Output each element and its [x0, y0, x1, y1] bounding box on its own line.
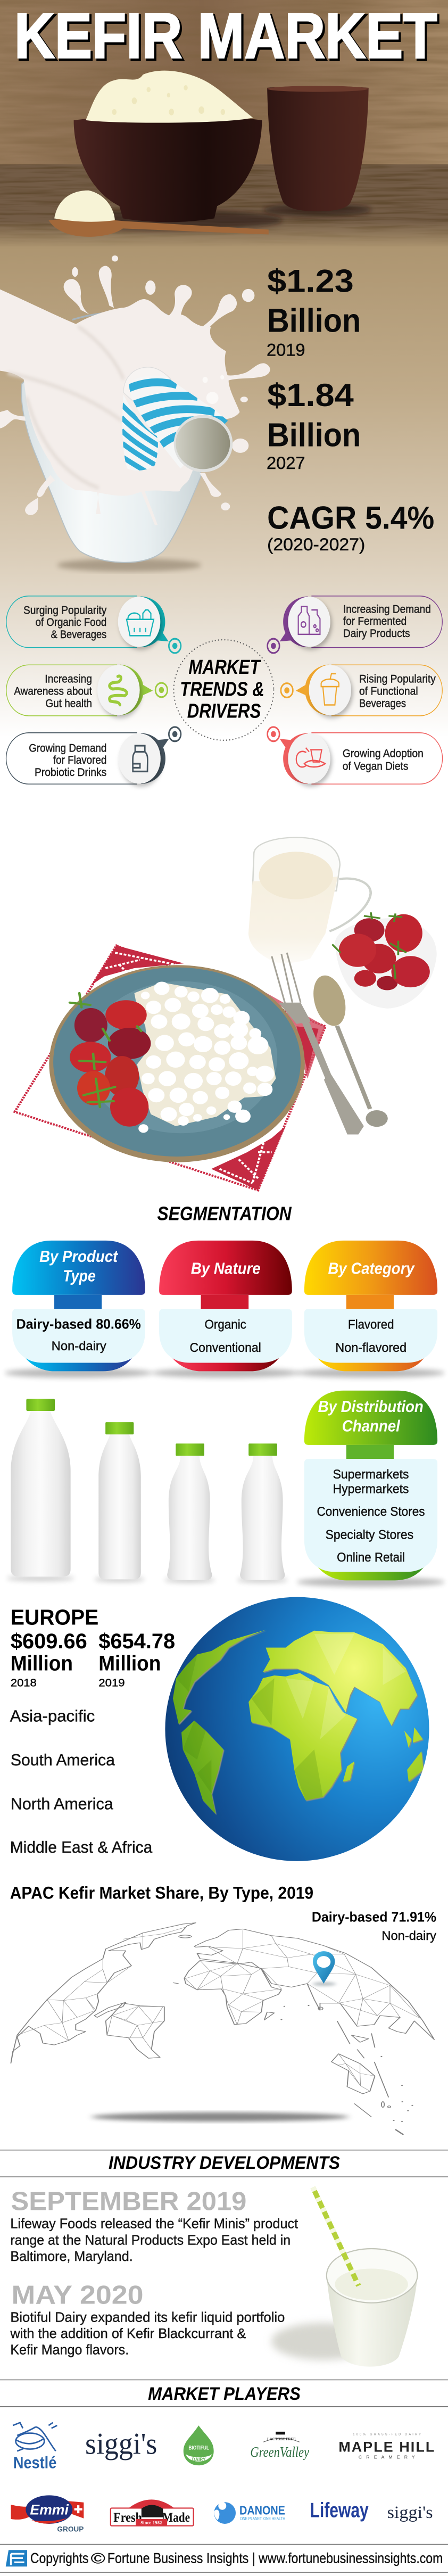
logo: Lifeway: Lifeway	[310, 2499, 369, 2522]
logo: Maple Hill: CREAMERY	[359, 2454, 415, 2459]
panel: market trends and drivers	[6, 596, 443, 784]
card: by distribution channel: Specialty Stores	[326, 1528, 413, 1542]
logo: Green Valley	[250, 2432, 310, 2461]
logo: Nestle: Nestlé	[13, 2454, 56, 2472]
card: by category: Flavored	[348, 1317, 394, 1332]
logo: Danone: DANONE	[239, 2503, 285, 2517]
heading: APAC share: APAC Kefir Market Share, By Type, 2019	[10, 1884, 313, 1903]
driver: functional beverages: of Functional	[359, 685, 418, 698]
value 2018: Million	[11, 1651, 73, 1675]
copyright text: ©	[91, 2550, 105, 2566]
card: by nature	[152, 1241, 300, 1378]
value 2019: Billion	[267, 302, 361, 339]
logo: siggi's small: siggi's	[387, 2503, 433, 2522]
card: by product type	[4, 1241, 153, 1378]
photo: kefir mug, strawberries and cottage cheese plate	[15, 837, 437, 1190]
heading: MARKET PLAYERS	[148, 2384, 301, 2404]
development: September 2019: Baltimore, Maryland.	[10, 2249, 133, 2264]
driver: fermented dairy: for Fermented	[343, 615, 406, 628]
value 2027: $1.84	[267, 377, 354, 414]
logo: Biotiful Dairy: BIOTIFUL	[188, 2445, 209, 2451]
footer: copyright bar	[0, 2545, 448, 2572]
heading: INDUSTRY DEVELOPMENTS	[109, 2153, 340, 2173]
driver: organic food	[6, 596, 181, 653]
card: by distribution channel: Supermarkets	[333, 1467, 409, 1481]
card: by nature: Conventional	[190, 1340, 261, 1355]
APAC share labels	[312, 1910, 437, 1943]
regions list	[10, 1707, 152, 1856]
logo: Emmi Group: GROUP	[57, 2524, 84, 2533]
value 2018	[11, 1629, 87, 1689]
card: by distribution channel: Online Retail	[337, 1550, 405, 1565]
illustration: milk splash and bowl with striped straw cup	[0, 255, 270, 572]
logo: Emmi Group	[11, 2495, 84, 2533]
value 2027: 2027	[267, 454, 305, 473]
logo: Emmi Group: Emmi	[30, 2501, 69, 2517]
logo: FreshMade	[111, 2499, 194, 2526]
regions list: North America	[11, 1794, 113, 1813]
logo: Nestle	[13, 2423, 57, 2472]
driver: functional beverages	[281, 665, 442, 716]
logo: Danone: ONE PLANET. ONE HEALTH	[240, 2516, 285, 2521]
driver: probiotic drinks: for Flavored	[53, 754, 106, 766]
card: by nature: Organic	[204, 1317, 246, 1332]
logo: Maple Hill	[338, 2433, 434, 2459]
icon: location pin	[313, 1951, 336, 1986]
logo: Maple Hill: 100% GRASS-FED DAIRY	[353, 2433, 421, 2436]
cottage cheese	[134, 981, 276, 1133]
value 2019: 2019	[98, 1677, 125, 1689]
fork	[272, 953, 364, 1134]
driver: organic food: Surging Popularity	[23, 604, 107, 617]
driver: gut health: Awareness about	[14, 685, 93, 698]
development: May 2020: Kefir Mango flavors.	[10, 2343, 129, 2358]
hero photo: cottage cheese bowl on wood	[0, 0, 448, 248]
logo: Green Valley: LACTOSE FREE	[267, 2437, 296, 2441]
logo: FreshMade: Since 1982	[140, 2520, 162, 2525]
value 2019: Million	[98, 1651, 161, 1675]
driver: probiotic drinks: Probiotic Drinks	[35, 766, 107, 779]
logo: siggi's: siggi's	[85, 2428, 157, 2461]
background gradient	[0, 245, 448, 737]
card: by distribution channel: Convenience Stores	[317, 1505, 425, 1519]
value 2019: $1.23	[267, 263, 354, 299]
title: KEFIR MARKET	[16, 2, 439, 73]
card: by product type: By Product	[39, 1247, 119, 1266]
heading: Europe: EUROPE	[11, 1605, 98, 1629]
copyright text: Copyrights	[30, 2550, 88, 2566]
development: May 2020: MAY 2020	[11, 2280, 144, 2309]
panel: industry developments	[0, 2150, 448, 2367]
card: by product type: Dairy-based 80.66%	[16, 1317, 141, 1332]
heading: SEGMENTATION	[157, 1203, 292, 1224]
mug of kefir	[248, 837, 371, 963]
logo: Biotiful Dairy: DAIRY	[192, 2457, 206, 2463]
driver: fermented dairy: Increasing Demand	[343, 603, 431, 616]
value 2019	[98, 1629, 175, 1689]
regions list: Asia-pacific	[10, 1707, 95, 1725]
logo: Maple Hill: MAPLE HILL	[338, 2439, 434, 2455]
driver: probiotic drinks: Growing Demand	[29, 742, 106, 755]
value 2019: 2019	[267, 341, 305, 360]
driver: functional beverages: Rising Popularity	[359, 673, 436, 686]
driver: vegan diets: of Vegan Diets	[343, 760, 409, 773]
card: by nature: By Nature	[191, 1259, 261, 1277]
value 2019: $654.78	[98, 1629, 175, 1653]
development: September 2019	[10, 2187, 298, 2264]
driver: gut health: Increasing	[45, 673, 92, 686]
centre heading: MARKET	[188, 656, 262, 678]
icon: Fortune Business Insights logo	[6, 2550, 27, 2566]
regions list: South America	[11, 1751, 115, 1769]
logo: FreshMade: Made	[162, 2509, 190, 2525]
logo: FreshMade: Fresh	[113, 2509, 142, 2525]
card: by distribution channel	[296, 1391, 445, 1587]
spoon	[309, 973, 388, 1127]
CAGR	[267, 500, 434, 555]
illustration: four milk bottles	[6, 1399, 288, 1583]
card: by category	[296, 1241, 445, 1378]
CAGR: CAGR 5.4%	[267, 500, 434, 536]
strawberries on plate	[70, 993, 151, 1127]
development: September 2019: range at the Natural Products Expo East held in	[10, 2233, 291, 2248]
value 2027	[267, 377, 361, 473]
driver: probiotic drinks	[6, 727, 181, 784]
development: May 2020	[10, 2280, 285, 2358]
napkin	[15, 946, 326, 1190]
card: by distribution channel: By Distribution	[318, 1397, 424, 1415]
logo: Green Valley: GreenValley	[250, 2444, 310, 2461]
panel: regional data with globe	[10, 1597, 437, 1943]
APAC share labels: Non-dairy	[381, 1928, 437, 1943]
card: by product type: Non-dairy	[52, 1339, 107, 1353]
title: KEFIR MARKET	[14, 0, 437, 72]
development: May 2020: Biotiful Dairy expanded its kefir liquid portfolio	[10, 2310, 285, 2325]
value 2027: Billion	[267, 416, 361, 453]
centre heading: TRENDS &	[180, 678, 264, 700]
driver: fermented dairy	[268, 596, 442, 653]
regions list: Middle East & Africa	[10, 1838, 152, 1856]
driver: vegan diets: Growing Adoption	[343, 747, 424, 760]
card: by distribution channel: Hypermarkets	[333, 1482, 409, 1496]
APAC share labels: Dairy-based 71.91%	[312, 1910, 436, 1925]
card: by category: By Category	[328, 1259, 415, 1277]
driver: functional beverages: Beverages	[359, 697, 406, 710]
plate	[49, 965, 305, 1162]
driver: organic food: & Beverages	[51, 628, 107, 641]
icon: globe	[165, 1597, 429, 1861]
development: May 2020: with the addition of Kefir Blackcurrant &	[10, 2326, 246, 2341]
card: by product type: Type	[63, 1266, 96, 1285]
driver: organic food: of Organic Food	[36, 616, 106, 629]
driver: fermented dairy: Dairy Products	[343, 628, 410, 640]
CAGR: (2020-2027)	[267, 535, 365, 555]
card: by distribution channel: Channel	[342, 1416, 401, 1435]
logo: Biotiful Dairy	[184, 2425, 214, 2465]
logo: Danone	[214, 2502, 285, 2524]
panel: segmentation	[4, 1203, 445, 1587]
centre heading: DRIVERS	[187, 700, 261, 722]
market size figures	[267, 263, 434, 555]
photo: glass of milk with straw	[271, 2187, 418, 2367]
development: September 2019: SEPTEMBER 2019	[11, 2187, 246, 2216]
bowl of strawberries	[332, 912, 437, 1009]
development: September 2019: Lifeway Foods released the “Kefir Minis” product	[10, 2216, 298, 2231]
value 2018: 2018	[11, 1677, 37, 1689]
chart: wireframe world map	[11, 1923, 434, 2134]
panel: market players	[0, 2380, 448, 2533]
centre heading	[173, 640, 273, 740]
driver: vegan diets	[268, 727, 443, 784]
driver: gut health	[6, 665, 168, 716]
card: by category: Non-flavored	[335, 1340, 406, 1355]
value 2019	[267, 263, 361, 360]
driver: gut health: Gut health	[45, 697, 92, 710]
value 2018: $609.66	[11, 1629, 87, 1653]
